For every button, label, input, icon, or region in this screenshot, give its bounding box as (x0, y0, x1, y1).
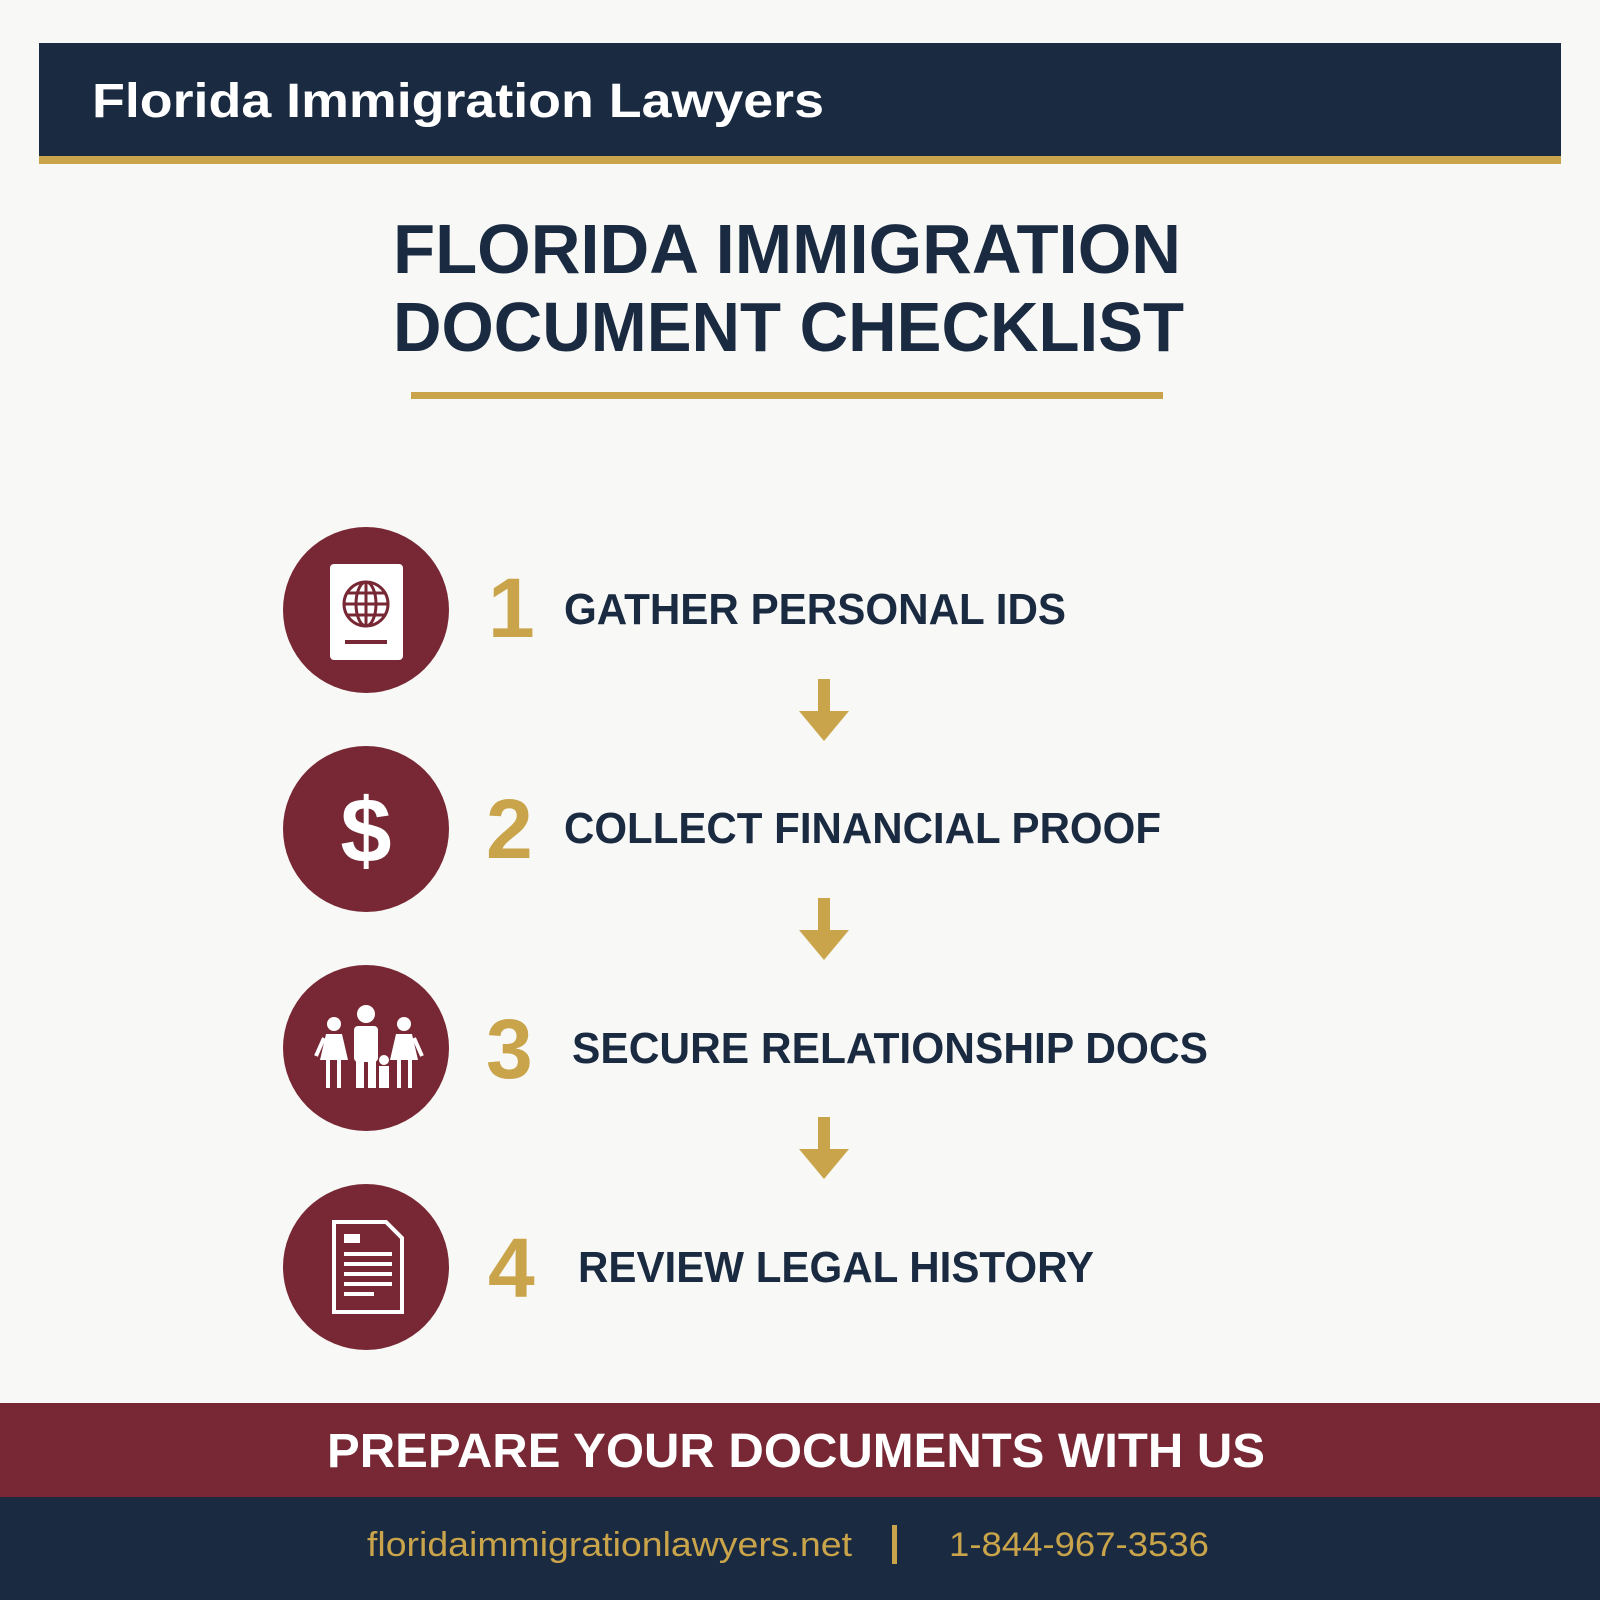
header bar (39, 43, 1561, 164)
arrow 1 (799, 679, 849, 741)
step 3: 3 (486, 1002, 533, 1096)
step 2: 2 (486, 782, 533, 876)
step 2: COLLECT FINANCIAL PROOF (564, 804, 1161, 853)
icon: passport (330, 564, 403, 660)
footer: 1-844-967-3536 (949, 1526, 1209, 1564)
step 3 (283, 965, 1208, 1131)
step 4: REVIEW LEGAL HISTORY (578, 1243, 1094, 1292)
title (393, 210, 1184, 366)
header text: Florida Immigration Lawyers (92, 75, 824, 128)
step 4: 4 (488, 1221, 535, 1315)
icon: document (334, 1222, 402, 1312)
arrow 2 (799, 898, 849, 960)
title underline (411, 392, 1163, 399)
title: FLORIDA IMMIGRATION (393, 210, 1181, 288)
step 1: GATHER PERSONAL IDS (564, 585, 1066, 634)
banner: call to action: PREPARE YOUR DOCUMENTS WITH US (327, 1425, 1265, 1478)
footer (0, 1497, 1600, 1600)
step 4 (283, 1184, 1094, 1350)
banner: call to action (0, 1403, 1600, 1497)
title: DOCUMENT CHECKLIST (393, 288, 1184, 366)
icon: family (316, 1005, 422, 1088)
footer: floridaimmigrationlawyers.net (367, 1526, 853, 1564)
step 3: SECURE RELATIONSHIP DOCS (572, 1024, 1208, 1073)
step 1: 1 (488, 561, 535, 655)
icon: dollar: $ (340, 780, 392, 882)
arrow 3 (799, 1117, 849, 1179)
step 1 (283, 527, 1066, 693)
step 2 (283, 746, 1161, 912)
